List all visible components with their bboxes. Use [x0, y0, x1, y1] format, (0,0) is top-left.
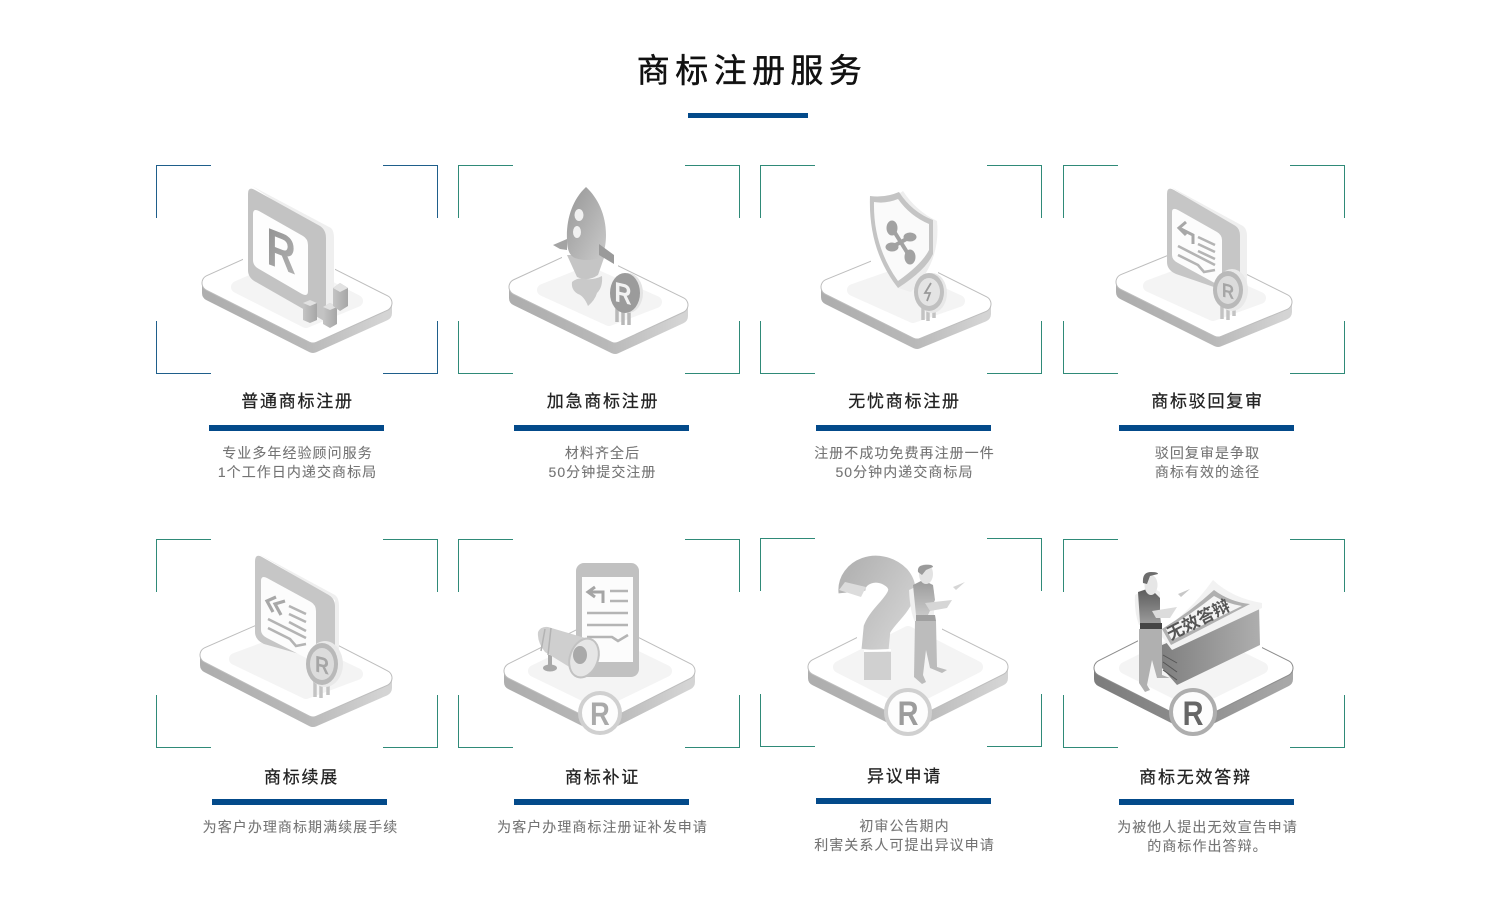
description: 初审公告期内 [859, 818, 950, 834]
illustration: R panel on platform: R [266, 217, 296, 287]
card heading: 普通商标注册 [241, 392, 354, 411]
illustration: rocket on platform [517, 187, 680, 346]
description: 材料齐全后 [565, 445, 640, 461]
description: 50分钟提交注册 [549, 464, 656, 480]
card heading: 商标无效答辩 [1139, 768, 1252, 787]
description: 为被他人提出无效宣告申请 [1117, 819, 1298, 835]
description [549, 445, 656, 480]
description: 驳回复审是争取 [1155, 445, 1260, 461]
card: 商标续展 [156, 540, 438, 835]
illustration: question mark and person on platform: R [898, 694, 919, 733]
illustration: document stack and person on platform: R [1183, 694, 1204, 733]
heading bar [514, 425, 689, 431]
description: 专业多年经验顾问服务 [222, 445, 373, 461]
illustration: document stack and person on platform [1102, 572, 1285, 734]
description [814, 445, 995, 480]
description: 为客户办理商标期满续展手续 [203, 819, 398, 835]
illustration: document on platform [1124, 187, 1284, 339]
illustration: shield on platform [829, 191, 983, 341]
heading bar [514, 799, 689, 805]
illustration: renewal document on platform [208, 554, 384, 719]
description: 的商标作出答辩。 [1147, 838, 1268, 854]
card heading: 异议申请 [867, 767, 942, 786]
description: 注册不成功免费再注册一件 [814, 445, 995, 461]
frame corners [458, 166, 740, 374]
description: 商标有效的途径 [1155, 464, 1260, 480]
frame corners [760, 166, 1042, 374]
frame corners [1064, 166, 1344, 374]
description: 为客户办理商标注册证补发申请 [497, 819, 708, 835]
description: 50分钟内递交商标局 [835, 464, 974, 480]
heading bar [1119, 425, 1294, 431]
description: 利害关系人可提出异议申请 [814, 837, 995, 853]
illustration: renewal document on platform: R [315, 650, 329, 680]
card: 商标无效答辩 [1064, 540, 1344, 854]
card heading: 商标驳回复审 [1151, 392, 1264, 411]
card heading: 商标续展 [264, 768, 339, 787]
description: 1个工作日内递交商标局 [218, 464, 377, 480]
illustration: document stack and person on platform: 无效答辩 [1163, 595, 1233, 644]
card heading: 无忧商标注册 [848, 392, 961, 411]
description [814, 818, 995, 853]
title: 商标注册服务 [637, 52, 867, 89]
card: 异议申请 [760, 538, 1042, 853]
card: 无忧商标注册 [760, 166, 1042, 480]
card heading: 商标补证 [565, 768, 640, 787]
illustration: document on platform: R [1222, 278, 1235, 304]
card: 商标补证 [458, 540, 740, 835]
frame corners [156, 166, 438, 374]
illustration: phone and megaphone on platform: R [590, 697, 610, 733]
card: 商标驳回复审 [1064, 166, 1344, 480]
heading bar [212, 799, 387, 805]
heading bar [1119, 799, 1294, 805]
card heading: 加急商标注册 [547, 392, 659, 411]
frame corners [156, 540, 438, 748]
illustration: rocket on platform: R [614, 275, 632, 311]
illustration: R panel on platform [210, 186, 384, 345]
description [218, 445, 377, 480]
description [1117, 819, 1298, 854]
frame corners [1064, 540, 1344, 748]
description [1155, 445, 1260, 480]
heading bar [209, 425, 384, 431]
illustration: phone and megaphone on platform [512, 563, 687, 733]
frame corners [458, 540, 740, 748]
frame corners [760, 538, 1042, 746]
card: 加急商标注册 [458, 166, 740, 480]
card: 普通商标注册 [156, 166, 438, 480]
heading bar [816, 425, 991, 431]
heading bar [816, 798, 991, 804]
illustration: question mark and person on platform [816, 564, 1000, 734]
title underline [688, 113, 808, 118]
